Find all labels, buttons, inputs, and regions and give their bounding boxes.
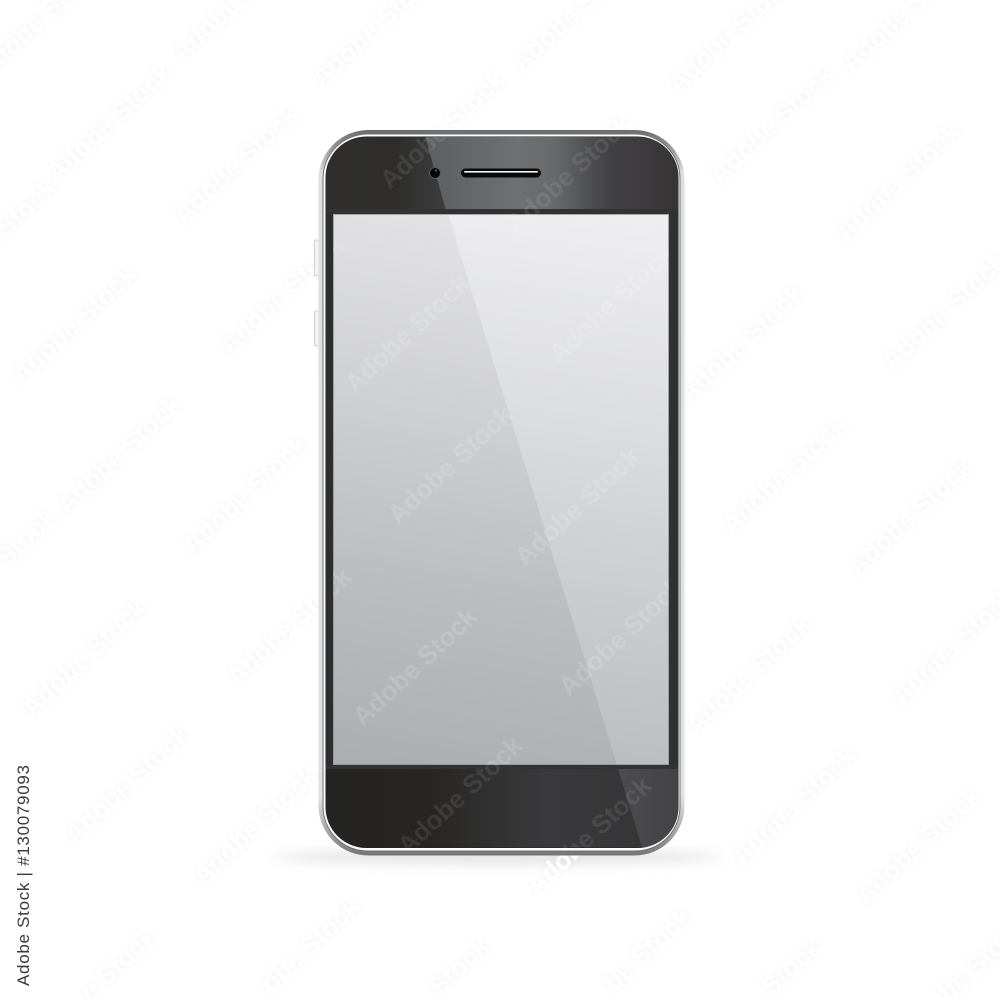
watermark pattern on background: Adobe Stock (842, 451, 979, 582)
watermark pattern on background: Adobe Stock (6, 259, 143, 390)
watermark pattern on background: Adobe Stock (16, 592, 153, 723)
watermark pattern on background: Adobe Stock (553, 571, 690, 702)
watermark over screen: Adobe Stock (339, 268, 476, 399)
phone (314, 130, 685, 856)
watermark pattern on background: Adobe Stock (726, 740, 863, 871)
watermark pattern on background: Adobe Stock (51, 389, 188, 520)
watermark over bezels: Adobe Stock (501, 108, 638, 239)
top bezel left (326, 137, 446, 209)
watermark over screen: Adobe Stock (501, 108, 638, 239)
watermark pattern on background: Adobe Stock (187, 760, 324, 891)
watermark pattern on background: Adobe Stock (704, 59, 841, 190)
watermark pattern on background: Adobe Stock (168, 99, 305, 230)
bottom strip (326, 765, 474, 769)
ground shadow (272, 850, 722, 864)
watermark pattern on background: Adobe Stock (521, 770, 658, 901)
speaker grille (461, 168, 541, 178)
watermark over screen: Adobe Stock (382, 399, 519, 530)
side buttons (314, 240, 320, 346)
watermark pattern on background: Adobe Stock (221, 561, 358, 692)
bezel lower strip (436, 209, 652, 214)
bottom bezel (333, 769, 642, 848)
screen (333, 214, 669, 765)
watermark pattern on background: Adobe Stock (673, 278, 810, 409)
watermark over screen: Adobe Stock (347, 601, 484, 732)
bottom bezel reflection (618, 769, 678, 848)
watermark pattern on background: Adobe Stock (830, 116, 967, 247)
watermark pattern on background: Adobe Stock (374, 64, 511, 195)
watermark pattern on background: Adobe Stock (392, 730, 529, 861)
stock id label: Adobe Stock | #130079093 (14, 765, 33, 986)
front camera (429, 167, 441, 179)
phone body frame (318, 130, 684, 856)
watermark pattern on background: be Stock (597, 901, 697, 997)
watermark over bezels (383, 137, 653, 848)
glass front (325, 136, 685, 854)
screen reflection (448, 214, 669, 765)
watermark over bezels: Adobe Stock (187, 760, 324, 891)
watermark over screen: Adobe Stock (214, 229, 351, 360)
watermark pattern on background: Adobe Stock (41, 57, 178, 188)
watermark pattern on background: Adobe Stock (59, 719, 196, 850)
watermark over screen: Adobe Stock (553, 571, 690, 702)
watermark pattern on background: obe Stock (255, 891, 366, 998)
side bezels (326, 216, 333, 765)
watermark over screen: Adobe Stock (392, 730, 529, 861)
watermark pattern on background: Adobe Stock (716, 409, 853, 540)
watermark over bezels: Adobe Stock (521, 770, 658, 901)
watermark over bezels: Adobe Stock (374, 64, 511, 195)
watermark pattern on background: Adobe Stock (214, 229, 351, 360)
watermark pattern on background: Stock (423, 931, 495, 1000)
watermark pattern on background: Adobe Stock (501, 108, 638, 239)
watermark pattern on background: Adobe Stock (680, 609, 817, 740)
watermark over screen: Adobe Stock (543, 238, 680, 369)
screen edge (334, 214, 668, 764)
watermark over screen: Adobe Stock (221, 561, 358, 692)
watermark pattern on background: Stock (755, 931, 827, 1000)
watermark pattern on background: Adobe Stock (850, 780, 987, 911)
watermark over screen (333, 139, 669, 765)
watermark pattern on background: Adobe Stock (177, 429, 314, 560)
top bezel reflection (425, 137, 678, 209)
watermark over screen: Adobe Stock (509, 441, 646, 572)
watermark over bezels: Adobe Stock (392, 730, 529, 861)
